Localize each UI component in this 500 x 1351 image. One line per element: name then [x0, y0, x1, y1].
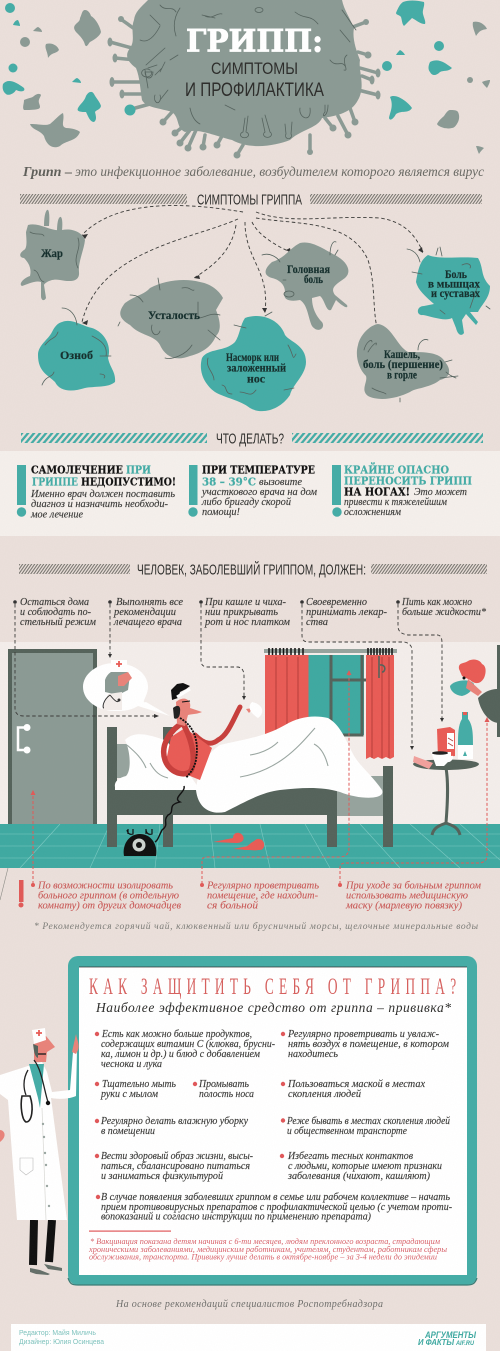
caregiver in mask: [450, 645, 500, 737]
phone with cord: [124, 786, 184, 856]
patient instructions: Остаться дома: [20, 596, 89, 608]
protection tips list: и общественном транспорте: [287, 1125, 407, 1137]
advice 1: self-treatment: диагноз и назначить необходи-: [31, 498, 168, 510]
patient instructions: принимать лекар-: [306, 606, 387, 618]
advice 2: temperature: вызовите: [259, 476, 302, 488]
symptom: muscle pain: [407, 247, 490, 335]
symptom: headache: Головная: [287, 262, 330, 276]
title: [185, 24, 324, 101]
symptom: chills: Озноб: [60, 348, 93, 362]
vaccination footnote: хроническими заболеваниями, медицинским работникам, учителям, студентам, работникам сферы: [88, 1245, 447, 1254]
caution texts: маску (марлевую повязку): [345, 900, 462, 912]
patient instructions: Выполнять все: [116, 596, 183, 608]
protection tips list: Есть как можно больше продуктов,: [101, 1028, 252, 1040]
symptom: runny nose: нос: [247, 372, 266, 386]
advice 1: self-treatment: ПРИ: [126, 464, 151, 476]
credits: Дизайнер: Юлия Осинцева: [19, 1337, 105, 1346]
dashed leaders from instructions: [15, 604, 444, 750]
patient instructions: лечащего врача: [113, 616, 182, 628]
vaccination footnote: обслуживания, транспорта. Прививку лучше делать в октябре-ноябре – за 3-4 недели до эпидемии: [89, 1252, 437, 1262]
vaccination footnote: [88, 1230, 447, 1262]
advice 3: on your feet: Это может: [414, 486, 467, 498]
caution texts: [37, 880, 481, 912]
symptom: runny nose: Насморк или: [226, 350, 279, 364]
protection tips list: нять воздух в помещение, в котором: [288, 1038, 449, 1050]
symptom: cough: боль (першение): [363, 357, 443, 371]
heading: the patient should: ЧЕЛОВЕК, ЗАБОЛЕВШИЙ ГРИППОМ, ДОЛЖЕН:: [137, 560, 366, 578]
advice 2: temperature: 38 – 39°С: [202, 476, 256, 488]
protection tips list: В случае появления заболевших гриппом в семье или рабочем коллективе – начать: [101, 1191, 450, 1203]
patient instructions: больше жидкости*: [402, 606, 486, 618]
symptom: fever: [20, 210, 85, 300]
advice 1: self-treatment: ГРИППЕ: [32, 476, 78, 488]
advice 1: self-treatment: НЕДОПУСТИМО!: [81, 476, 176, 488]
title: ГРИПП:: [186, 24, 323, 60]
logo: И ФАКТЫ: [418, 1337, 454, 1347]
room background: [0, 642, 500, 824]
logo: AIF.RU: [455, 1341, 475, 1347]
protection tips list: паться, сбалансировано питаться: [101, 1160, 250, 1172]
panel title: КАК ЗАЩИТИТЬ СЕБЯ ОТ ГРИППА?: [89, 974, 456, 1000]
protection tips list: Вести здоровый образ жизни, высы-: [101, 1150, 253, 1162]
advice 2: temperature: участкового врача на дом: [201, 486, 317, 498]
logo: АРГУМЕНТЫ: [424, 1330, 477, 1340]
advice 2: temperature: [188, 464, 317, 518]
patient instructions: рот и нос платком: [204, 616, 290, 628]
caution texts: помещение, где находит-: [207, 890, 318, 902]
symptom: muscle pain: в мышцах: [428, 276, 480, 290]
protection tips list: Промывать: [198, 1078, 249, 1090]
protection tips list: Регулярно проветривать и увлаж-: [287, 1028, 439, 1040]
protection tips list: руки с мылом: [100, 1088, 158, 1100]
caution texts: больного гриппом (в отдельную: [38, 890, 179, 902]
heading: the patient should: [19, 560, 487, 578]
doctor thought bubble: [83, 660, 170, 716]
title: И ПРОФИЛАКТИКА: [185, 80, 324, 101]
symptom: cough: в горле: [387, 368, 418, 382]
caution texts: ся больной: [207, 900, 259, 912]
credits: [19, 1328, 105, 1346]
symptom: muscle pain: и суставах: [431, 286, 480, 300]
protection tips list: заболевания (чихают, кашляют): [287, 1170, 430, 1182]
patient instructions: рекомендации: [113, 606, 176, 618]
small viruses right: [382, 0, 490, 154]
advice 1: self-treatment: мое лечение: [30, 508, 83, 520]
advice 2: temperature: помощи!: [202, 506, 240, 518]
protection tips list: Реже бывать в местах скопления людей: [286, 1115, 450, 1127]
caution texts: Регулярно проветривать: [206, 880, 319, 892]
protection tips list: полость носа: [199, 1088, 254, 1100]
symptom: runny nose: заложенный: [227, 360, 286, 374]
door: [8, 649, 97, 824]
advice 1: self-treatment: [17, 464, 176, 520]
symptom: chills: [38, 308, 115, 390]
heading: symptoms: [20, 192, 482, 208]
patient instructions: ства: [306, 616, 328, 628]
panel subtitle: Наиболее эффективное средство от гриппа – прививка*: [95, 1000, 451, 1015]
table with drink and pills: [413, 712, 479, 835]
advice 3: on your feet: ПЕРЕНОСИТЬ ГРИПП: [344, 474, 472, 488]
intro sentence: Грипп –: [22, 165, 72, 180]
patient instructions: Пить как можно: [401, 596, 472, 608]
advice 2: temperature: либо бригаду скорой: [201, 496, 291, 508]
logo: [418, 1330, 477, 1347]
title: СИМПТОМЫ: [211, 59, 298, 78]
caution texts: комнату) от других домочадцев: [38, 900, 181, 912]
symptom: fatigue: Усталость: [148, 308, 201, 322]
heading: what to do: ЧТО ДЕЛАТЬ?: [216, 430, 284, 448]
sources line: На основе рекомендаций специалистов Роспотребнадзора: [115, 1299, 383, 1310]
panel: advice band: [0, 451, 500, 536]
symptom: fatigue: [118, 278, 223, 358]
advice 1: self-treatment: САМОЛЕЧЕНИЕ: [31, 464, 123, 476]
patient instructions: и соблюдать по-: [20, 606, 91, 618]
protection tips list: Тщательно мыть: [102, 1078, 176, 1090]
panel: how to protect yourself: [68, 956, 477, 1285]
symptom: muscle pain: Боль: [445, 267, 468, 281]
caution texts: По возможности изолировать: [37, 880, 173, 892]
protection tips list: Регулярно делать влажную уборку: [100, 1115, 248, 1127]
slippers: [213, 833, 264, 850]
protection tips list: с людьми, которые имеют признаки: [288, 1160, 442, 1172]
protection tips list: чеснока и лука: [101, 1058, 162, 1070]
advice 3: on your feet: осложнениям: [344, 506, 401, 518]
caution texts: использовать медицинскую: [346, 890, 468, 902]
credits: Редактор: Майя Миличь: [19, 1328, 96, 1337]
symptom: headache: [262, 242, 348, 330]
protection tips list: и заниматься физкультурой: [101, 1170, 223, 1182]
symptom: cough: Кашель,: [384, 347, 420, 361]
patient: [164, 683, 262, 780]
symptom: runny nose: [201, 312, 306, 411]
patient instructions: нии прикрывать: [205, 606, 278, 618]
symptom: cough: [357, 324, 458, 402]
small viruses left: [3, 0, 490, 154]
doctor illustration: [0, 1028, 79, 1275]
floor: [0, 824, 500, 900]
main virus blob: [108, 0, 380, 158]
symptom: fever: Жар: [41, 246, 63, 260]
protection tips list: вопоказаний и согласно инструкции по применению препарата): [101, 1210, 371, 1222]
advice 3: on your feet: НА НОГАХ!: [344, 486, 410, 498]
advice 3: on your feet: КРАЙНЕ ОПАСНО: [344, 462, 449, 476]
bed: [107, 727, 393, 847]
protection tips list: прием противовирусных препаратов с профилактической целью (с учетом проти-: [101, 1201, 452, 1213]
protection tips list: Избегать тесных контактов: [287, 1150, 413, 1162]
patient instructions: Своевременно: [306, 596, 367, 608]
caution texts: При уходе за больным гриппом: [345, 880, 481, 892]
exclamation mark: [18, 880, 24, 908]
red dashed leaders: [30, 670, 490, 887]
protection tips list: содержащих витамин С (клюква, брусни-: [101, 1038, 275, 1050]
protection tips list: скопления людей: [288, 1088, 361, 1100]
advice 2: temperature: ПРИ ТЕМПЕРАТУРЕ: [202, 464, 315, 476]
patient instructions: [13, 596, 486, 628]
drink footnote: * Рекомендуется горячий чай, клюквенный или брусничный морсы, щелочные минеральные воды: [34, 921, 479, 932]
intro sentence: это инфекционное заболевание, возбудителем которого является вирус: [75, 165, 485, 180]
protection tips list: ка, лимон и др.) и блюд с добавлением: [101, 1048, 260, 1060]
vaccination footnote: * Вакцинация показана детям начиная с 6-ти месяцев, людям преклонного возраста, страдающим: [90, 1237, 441, 1246]
heading: symptoms: СИМПТОМЫ ГРИППА: [197, 192, 302, 208]
bedding: [115, 716, 382, 813]
dashed arrows to symptoms: [82, 206, 423, 333]
patient instructions: При кашле и чиха-: [204, 596, 286, 608]
heading: what to do: [21, 430, 483, 448]
window with curtains: [264, 648, 397, 759]
protection tips list: в помещении: [101, 1125, 155, 1137]
advice 1: self-treatment: Именно врач должен поставить: [30, 488, 175, 500]
protection tips list: [95, 1028, 452, 1222]
protection tips list: находитесь: [288, 1048, 338, 1060]
advice 3: on your feet: [332, 462, 472, 518]
footer: [11, 1324, 486, 1351]
patient instructions: стельный режим: [20, 616, 96, 628]
advice 3: on your feet: привести к тяжелейшим: [344, 496, 447, 508]
protection tips list: Пользоваться маской в местах: [287, 1078, 425, 1090]
symptom: headache: боль: [304, 272, 323, 286]
